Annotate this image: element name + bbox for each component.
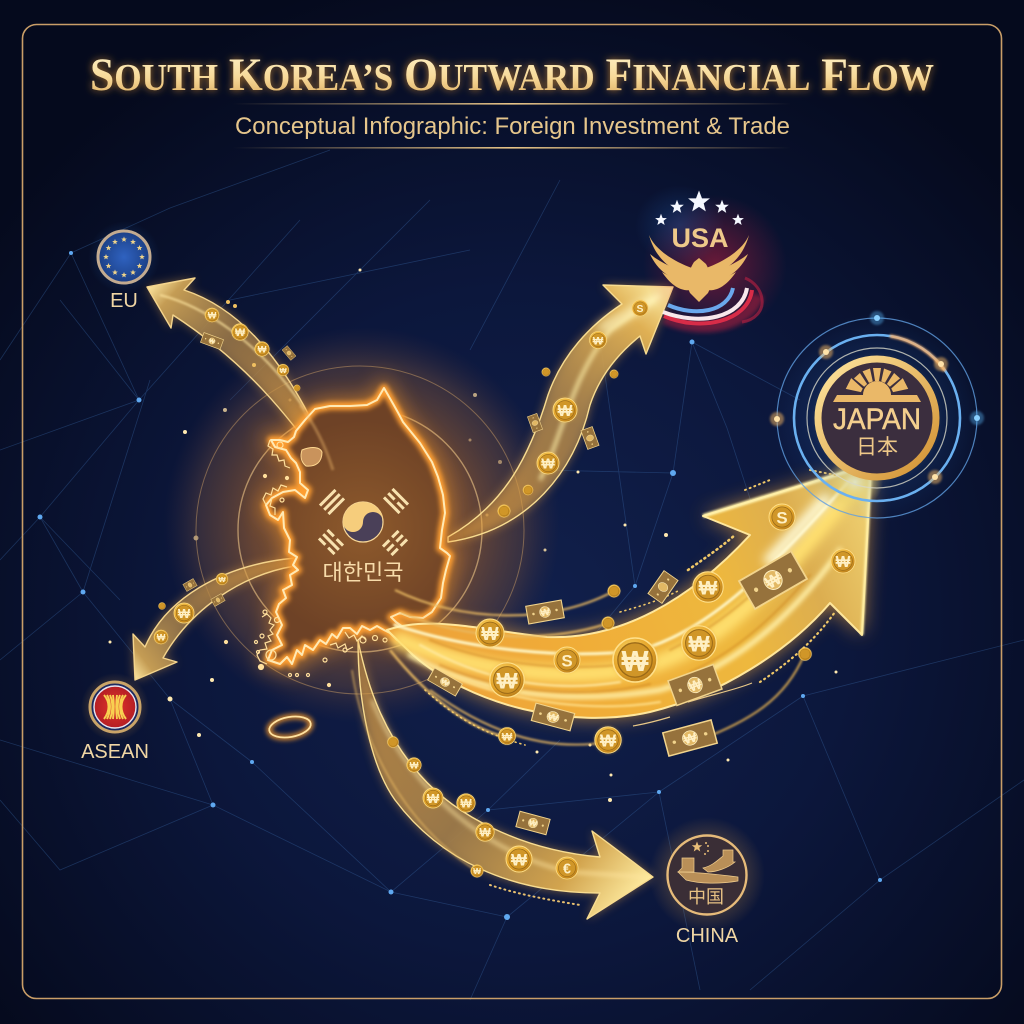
- China flow arrow: [352, 640, 653, 919]
- ASEAN emblem: [81, 673, 149, 741]
- Japan flow bills: ₩: [687, 676, 704, 695]
- EU emblem: [88, 221, 160, 293]
- USA flow coins and bills: [497, 300, 648, 518]
- EU flow coins and bills: ₩: [258, 345, 267, 355]
- Japan flow bills: [428, 551, 807, 756]
- Japan flow bills: ₩: [540, 607, 551, 619]
- label: 日本: 日本: [856, 436, 898, 459]
- label: ASEAN: ASEAN: [81, 741, 149, 763]
- label: CHINA: CHINA: [676, 925, 739, 947]
- Japan flow coins: ₩: [502, 731, 513, 743]
- Japan flow arrow: [387, 456, 883, 756]
- China great wall: [678, 850, 738, 883]
- USA rings: [663, 278, 762, 326]
- Japan flow coins: [475, 503, 856, 754]
- subtitle: Conceptual Infographic: Foreign Investment & Trade: [235, 113, 790, 140]
- Japan flow coins: ₩: [699, 578, 718, 600]
- China flow coins and bills: €: [563, 862, 571, 878]
- Japan flow coins: ₩: [688, 632, 710, 657]
- Japan flow coins: ₩: [496, 669, 518, 694]
- USA stars: [655, 190, 744, 225]
- China flow coins and bills: ₩: [479, 826, 491, 840]
- Jeju island: [268, 714, 312, 740]
- Japan flow bills: ₩: [682, 730, 699, 747]
- USA emblem: [635, 185, 787, 335]
- China flow coins and bills: ₩: [460, 797, 472, 811]
- Japan flow bills: ₩: [439, 677, 451, 688]
- gold dust along the arrow: [425, 470, 835, 745]
- label: USA: USA: [671, 223, 729, 253]
- EU flow coins and bills: ₩: [279, 366, 287, 375]
- South Korea halo and rings: [164, 327, 560, 723]
- label: JAPAN: JAPAN: [833, 403, 921, 436]
- EU flow coins and bills: ₩: [208, 338, 216, 346]
- South Korea map: [224, 388, 450, 686]
- Japan flow coins: ₩: [621, 646, 649, 678]
- China flow coins and bills: ₩: [410, 761, 419, 771]
- title: SOUTH KOREA’S OUTWARD FINANCIAL FLOW: [90, 49, 934, 101]
- Taegeuk symbol: [319, 489, 408, 555]
- label: EU: EU: [110, 290, 138, 312]
- ASEAN flow arrow: [133, 558, 295, 680]
- Japan rising sun: [833, 368, 921, 402]
- USA flow coins and bills: S: [637, 304, 644, 315]
- China flow coins and bills: ₩: [511, 851, 527, 869]
- coastal islands: [224, 440, 387, 686]
- China flow coins and bills: ₩: [528, 817, 539, 829]
- EU flow arrow: [147, 278, 328, 458]
- USA flow coins and bills: ₩: [558, 403, 573, 420]
- USA flow coins and bills: ₩: [593, 335, 604, 347]
- ASEAN flow coins and bills: [154, 573, 228, 644]
- Japan flow coins: S: [776, 509, 788, 527]
- China flow coins and bills: [387, 736, 579, 880]
- label: 대한민국: 대한민국: [323, 560, 403, 585]
- Japan flow coins: ₩: [836, 554, 851, 571]
- ASEAN flow coins and bills: ₩: [178, 606, 191, 621]
- Japan flow bills: ₩: [546, 712, 559, 725]
- China flow coins and bills: ₩: [473, 867, 481, 876]
- USA flow coins and bills: ₩: [541, 457, 555, 473]
- ASEAN flow coins and bills: ₩: [157, 632, 166, 643]
- Japan flow coins: ₩: [481, 624, 499, 644]
- China flow coins and bills: ₩: [427, 791, 440, 806]
- EU flow coins and bills: [200, 300, 300, 391]
- Japan emblem: [770, 311, 984, 523]
- ASEAN flow coins and bills: ₩: [218, 575, 226, 584]
- EU flow coins and bills: ₩: [235, 327, 246, 339]
- Japan orbit dots: [770, 311, 984, 484]
- label: 中国: 中国: [688, 887, 724, 907]
- Japan flow bills: ₩: [762, 568, 786, 593]
- USA flow arrow: [448, 285, 673, 542]
- Japan flow coins: S: [561, 652, 573, 670]
- USA eagle: [649, 235, 749, 302]
- Japan flow coins: ₩: [600, 731, 617, 751]
- EU flow coins and bills: ₩: [208, 310, 217, 321]
- China emblem: [649, 817, 765, 933]
